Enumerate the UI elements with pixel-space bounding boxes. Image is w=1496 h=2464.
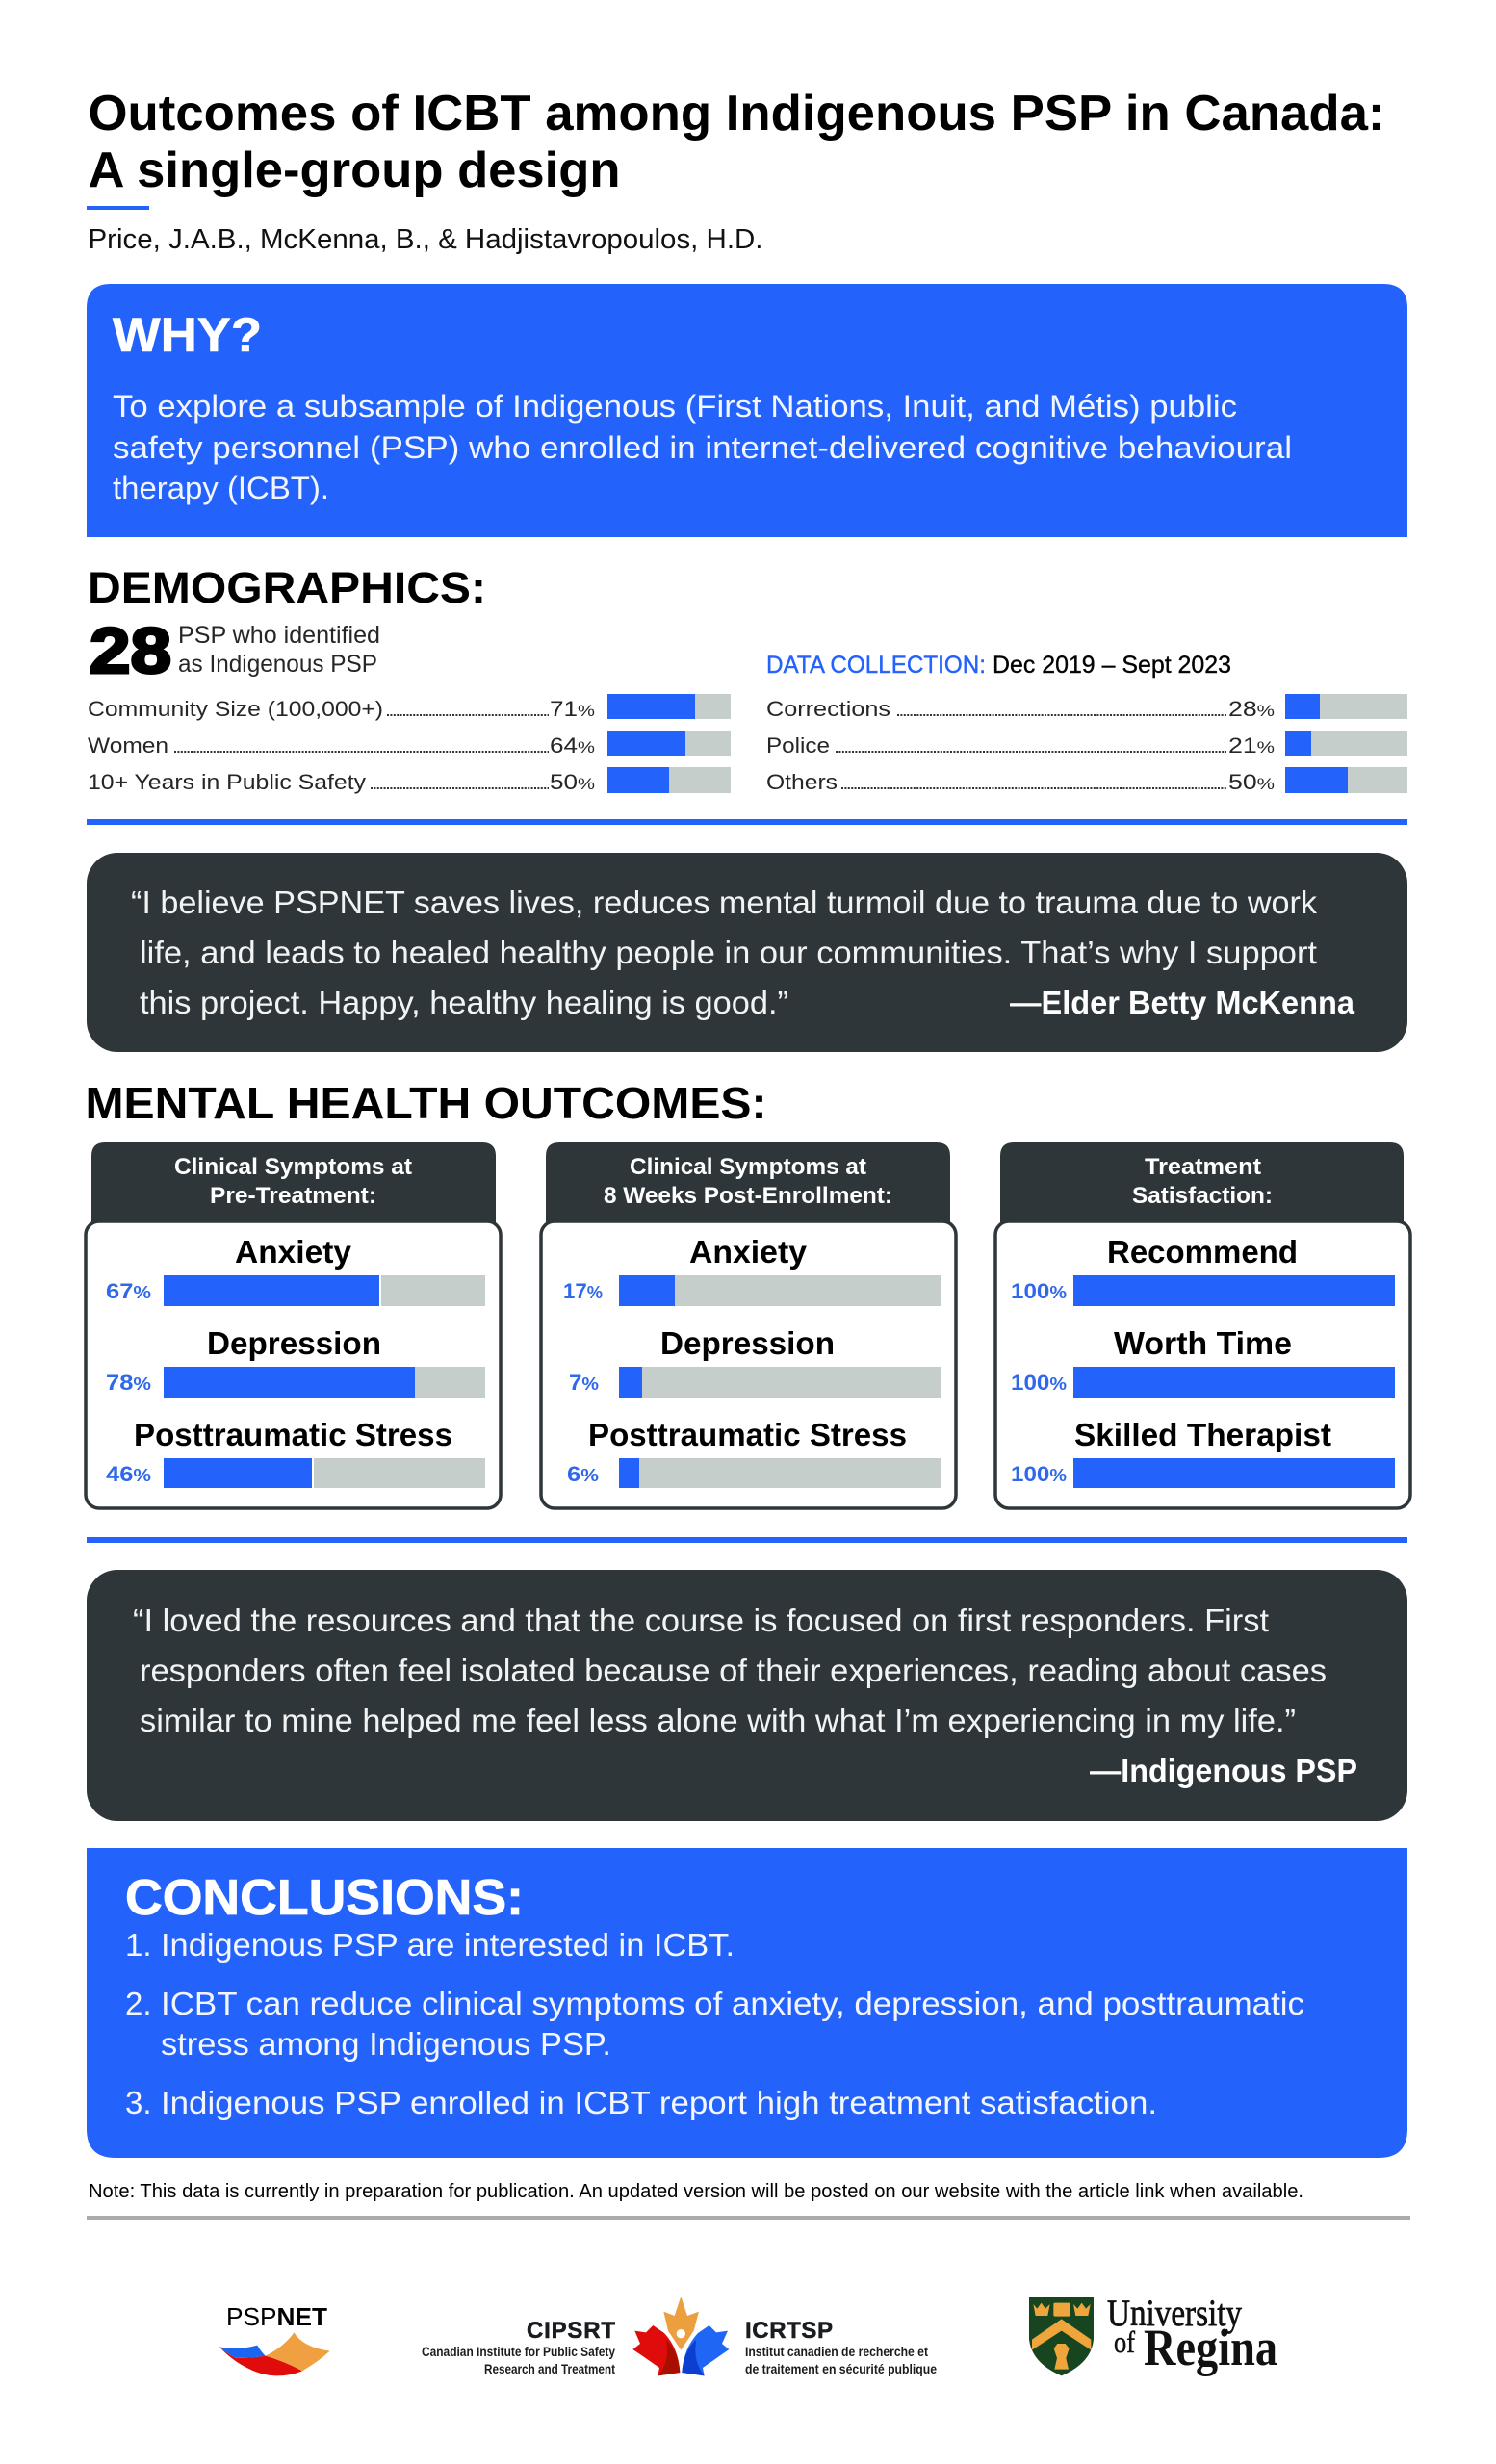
conclusion 2: stress among Indigenous PSP. (161, 2026, 611, 2062)
women row (88, 731, 731, 757)
anxiety bar: 17% (563, 1279, 603, 1303)
depression bar (569, 1325, 941, 1398)
logo: University of Regina: Regina (1144, 2319, 1277, 2376)
card header (1132, 1154, 1273, 1209)
why heading: WHY? (113, 308, 262, 362)
posttraumatic stress bar (106, 1417, 485, 1488)
posttraumatic stress bar (567, 1417, 941, 1488)
sample size callout: 28 (90, 615, 171, 687)
logo: CIPSRT (422, 2318, 615, 2376)
data collection: DATA COLLECTION: (766, 652, 986, 679)
corrections row: 28 % (1228, 697, 1275, 721)
mental health outcomes heading: MENTAL HEALTH OUTCOMES: (85, 1078, 766, 1128)
worth time bar: Worth Time (1114, 1325, 1292, 1361)
logo: ICRTSP (745, 2318, 937, 2376)
quote panel: Indigenous PSP: “I loved the resources and that the course is focused on first responders. First (133, 1603, 1269, 1638)
card header: Pre-Treatment: (210, 1183, 376, 1209)
posttraumatic stress bar: 6% (567, 1462, 599, 1486)
data collection: Dec 2019 – Sept 2023 (993, 652, 1231, 679)
logo: ICRTSP: ICRTSP (745, 2318, 833, 2344)
conclusion 2: ICBT can reduce clinical symptoms of anxiety, depression, and posttraumatic (161, 1986, 1304, 2021)
why body text: therapy (ICBT). (113, 471, 329, 505)
depression bar: Depression (207, 1325, 381, 1361)
recommend bar: 100% (1011, 1279, 1067, 1303)
years in public safety row (88, 767, 731, 794)
panel: 8 weeks post-enrollment symptoms (541, 1142, 956, 1508)
anxiety bar: Anxiety (689, 1234, 808, 1270)
card header: Satisfaction: (1132, 1183, 1273, 1209)
others row: 50 % (1228, 770, 1275, 794)
card header (174, 1154, 412, 1209)
corrections row (766, 694, 1407, 721)
posttraumatic stress bar: 46% (106, 1462, 151, 1486)
worth time bar: 100% (1011, 1371, 1067, 1395)
logo: PSPNET: PSPNET (226, 2302, 327, 2331)
card header: Treatment (1145, 1154, 1261, 1180)
depression bar (106, 1325, 485, 1398)
conclusions heading: CONCLUSIONS: (125, 1870, 524, 1926)
quote panel: Elder Betty McKenna: life, and leads to healed healthy people in our communities. That’s why I support (140, 935, 1317, 970)
recommend bar (1011, 1234, 1395, 1306)
logo: ICRTSP: de traitement en sécurité publique (745, 2361, 937, 2376)
conclusion 1: Indigenous PSP are interested in ICBT. (161, 1927, 735, 1963)
demographics heading: DEMOGRAPHICS: (88, 563, 486, 612)
depression bar: Depression (660, 1325, 835, 1361)
anxiety bar: Anxiety (235, 1234, 352, 1270)
quote panel: Elder Betty McKenna (87, 853, 1407, 1052)
years in public safety row: 10+ Years in Public Safety (88, 770, 366, 794)
logo: ICRTSP: Institut canadien de recherche et (745, 2344, 928, 2359)
sample size callout: PSP who identified (178, 622, 380, 649)
title (89, 86, 1384, 198)
skilled therapist bar (1011, 1417, 1395, 1488)
demographic bars: right column (766, 694, 1407, 794)
quote panel: Elder Betty McKenna: “I believe PSPNET saves lives, reduces mental turmoil due to trauma due to work (131, 885, 1318, 920)
quote attribution: —Elder Betty McKenna (1010, 985, 1355, 1020)
women row: 64 % (550, 733, 595, 757)
community size row: 71 % (550, 697, 595, 721)
conclusion 2 (125, 1986, 1304, 2062)
anxiety bar (106, 1234, 485, 1306)
title: A single-group design (89, 142, 621, 198)
conclusion 2: 2. (125, 1986, 152, 2021)
demographic bars: left column (88, 694, 731, 794)
logo: University of Regina: University (1107, 2293, 1242, 2334)
logo: University of Regina (1029, 2293, 1277, 2376)
note: Note: This data is currently in preparation for publication. An updated version will be posted on our website with the article link when available. (89, 2181, 1303, 2202)
card header: Clinical Symptoms at (174, 1154, 412, 1180)
corrections row: Corrections (766, 697, 890, 721)
conclusion 1: 1. (125, 1927, 152, 1963)
worth time bar (1011, 1325, 1395, 1398)
depression bar: 78% (106, 1371, 151, 1395)
conclusion 3: Indigenous PSP enrolled in ICBT report high treatment satisfaction. (161, 2085, 1157, 2120)
quote attribution: —Indigenous PSP (1090, 1753, 1357, 1788)
data collection (766, 652, 1231, 679)
card header (604, 1154, 892, 1209)
why body text: safety personnel (PSP) who enrolled in internet-delivered cognitive behavioural (113, 430, 1292, 465)
logo: CIPSRT: CIPSRT (527, 2318, 615, 2344)
panel: treatment satisfaction (995, 1142, 1410, 1508)
anxiety bar: 67% (106, 1279, 151, 1303)
panel: conclusions (87, 1848, 1407, 2158)
quote panel: Indigenous PSP: similar to mine helped me feel less alone with what I’m experiencing in my life.” (140, 1703, 1296, 1738)
community size row: Community Size (100,000+) (88, 697, 383, 721)
card header: Clinical Symptoms at (630, 1154, 866, 1180)
depression bar: 7% (569, 1371, 599, 1395)
logo: University of Regina: of (1114, 2324, 1135, 2359)
anxiety bar (563, 1234, 941, 1306)
skilled therapist bar: Skilled Therapist (1074, 1417, 1331, 1452)
conclusion 3: 3. (125, 2085, 152, 2120)
why body text: To explore a subsample of Indigenous (First Nations, Inuit, and Métis) public (113, 389, 1237, 424)
quote panel: Elder Betty McKenna: this project. Happy, healthy healing is good.” (140, 985, 788, 1020)
community size row (88, 694, 731, 721)
others row (766, 767, 1407, 794)
posttraumatic stress bar: Posttraumatic Stress (134, 1417, 452, 1452)
card header: 8 Weeks Post-Enrollment: (604, 1183, 892, 1209)
title: Outcomes of ICBT among Indigenous PSP in Canada: (89, 86, 1384, 141)
police row (766, 731, 1407, 757)
police row: Police (766, 733, 830, 757)
sample size callout: as Indigenous PSP (178, 651, 377, 678)
years in public safety row: 50 % (550, 770, 595, 794)
logo: PSPNET (219, 2302, 330, 2375)
posttraumatic stress bar: Posttraumatic Stress (588, 1417, 907, 1452)
quote panel: Indigenous PSP: responders often feel isolated because of their experiences, reading about cases (140, 1653, 1327, 1688)
quote panel: Indigenous PSP (87, 1570, 1407, 1821)
logo: maple leaf (632, 2297, 729, 2375)
authors: Price, J.A.B., McKenna, B., & Hadjistavropoulos, H.D. (89, 224, 762, 255)
why body text (113, 389, 1292, 505)
skilled therapist bar: 100% (1011, 1462, 1067, 1486)
panel: why (87, 284, 1407, 537)
logo: CIPSRT: Canadian Institute for Public Safety (422, 2344, 615, 2359)
logo: CIPSRT: Research and Treatment (484, 2361, 615, 2376)
panel: pre-treatment symptoms (86, 1142, 501, 1508)
police row: 21 % (1228, 733, 1275, 757)
women row: Women (88, 733, 168, 757)
sample size callout (90, 615, 380, 687)
others row: Others (766, 770, 838, 794)
recommend bar: Recommend (1107, 1234, 1298, 1270)
